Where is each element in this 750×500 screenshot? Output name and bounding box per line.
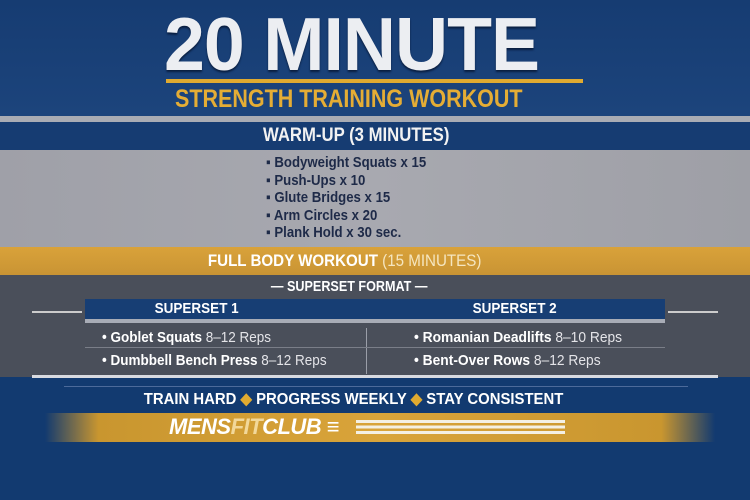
superset 1 items xyxy=(102,329,327,369)
warm-up list: ▪ Plank Hold x 30 sec. xyxy=(266,224,401,241)
superset 1 items: • Dumbbell Bench Press 8–12 Reps xyxy=(102,352,327,369)
warm-up list: ▪ Bodyweight Squats x 15 xyxy=(266,154,426,171)
speed lines xyxy=(356,420,565,434)
background header gradient xyxy=(0,0,750,116)
warm-up list: ▪ Push-Ups x 10 xyxy=(266,172,365,188)
superset header bar: SUPERSET 1 xyxy=(155,300,239,317)
superset 2 items xyxy=(414,329,622,369)
logo: MENSFITCLUB ≡ xyxy=(169,414,339,439)
superset 2 items: • Romanian Deadlifts 8–10 Reps xyxy=(414,329,622,346)
warm-up list: ▪ Arm Circles x 20 xyxy=(266,206,377,224)
workout panel xyxy=(0,275,750,377)
superset 2 items: • Bent-Over Rows 8–12 Reps xyxy=(414,352,601,369)
logo banner xyxy=(45,413,715,442)
bottom rule xyxy=(32,375,718,378)
gold rule xyxy=(166,79,583,83)
side rules xyxy=(32,311,82,313)
warm-up panel xyxy=(0,150,750,247)
subtitle: STRENGTH TRAINING WORKOUT xyxy=(175,85,523,113)
tagline: TRAIN HARD ◆ PROGRESS WEEKLY ◆ STAY CONSISTENT xyxy=(144,391,564,408)
full body header: FULL BODY WORKOUT (15 MINUTES) xyxy=(208,251,482,270)
warm-up list xyxy=(266,154,426,241)
row divider xyxy=(85,347,665,348)
warm-up header xyxy=(0,122,750,150)
full body header xyxy=(0,247,750,275)
superset format label: — SUPERSET FORMAT — xyxy=(271,278,427,295)
warm-up header: WARM-UP (3 MINUTES) xyxy=(263,125,449,146)
column divider xyxy=(366,328,367,374)
gray stripe xyxy=(0,116,750,122)
warm-up list: ▪ Glute Bridges x 15 xyxy=(266,189,390,206)
superset 1 items: • Goblet Squats 8–12 Reps xyxy=(102,329,271,346)
superset header bar xyxy=(85,299,665,323)
superset header bar: SUPERSET 2 xyxy=(473,300,557,317)
title: 20 MINUTE xyxy=(164,2,539,86)
